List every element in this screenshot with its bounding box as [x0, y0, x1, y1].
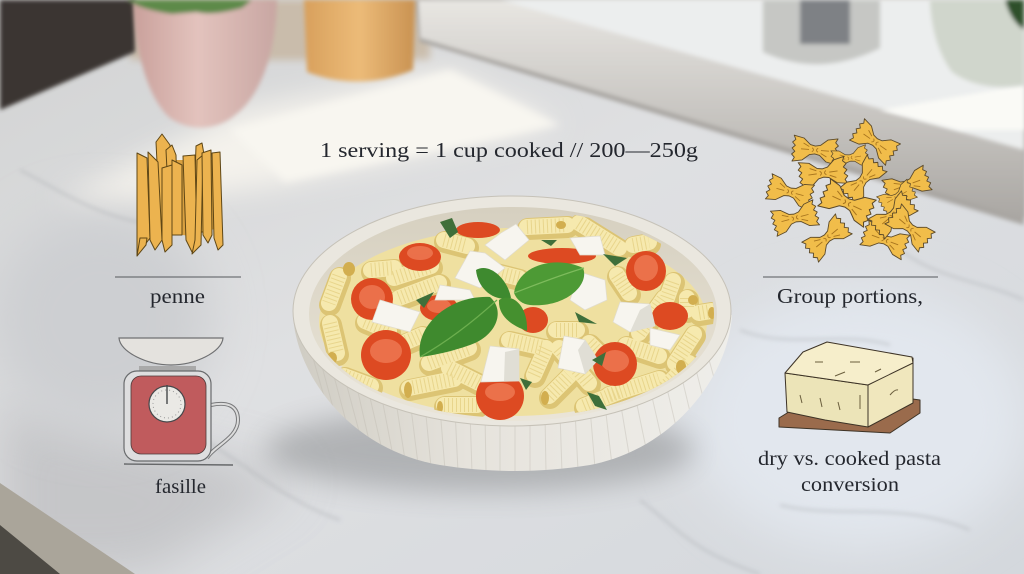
pink plant pot — [127, 0, 277, 127]
label: dry vs. cooked pasta conversion: conversion — [801, 474, 899, 496]
icon: penne pasta bundle — [137, 134, 223, 256]
basil leaves — [420, 262, 584, 357]
title: 1 serving = 1 cup cooked // 200—250g — [320, 138, 698, 162]
green plant pot — [930, 0, 1024, 87]
right divider — [763, 276, 938, 278]
tomatoes — [351, 222, 688, 420]
bowl body — [293, 315, 732, 471]
bowl of pasta — [265, 196, 732, 492]
label: dry vs. cooked pasta conversion — [758, 448, 941, 496]
herb flecks — [416, 218, 627, 410]
wooden container — [304, 0, 415, 82]
bowl rim — [293, 196, 731, 426]
label: dry vs. cooked pasta conversion: dry vs. cooked pasta — [758, 448, 941, 470]
left divider — [115, 276, 241, 278]
icon: farfalle pasta pile — [764, 118, 936, 263]
feta cubes — [372, 224, 680, 382]
label: group portions: Group portions, — [777, 284, 923, 308]
penne pasta — [327, 221, 716, 413]
icon: block of feta on board — [779, 342, 920, 433]
icon: kitchen scale mug — [119, 338, 238, 465]
label: penne: penne — [150, 287, 205, 308]
glass jar on window sill — [763, 0, 880, 64]
label: fasille: fasille — [155, 476, 206, 498]
